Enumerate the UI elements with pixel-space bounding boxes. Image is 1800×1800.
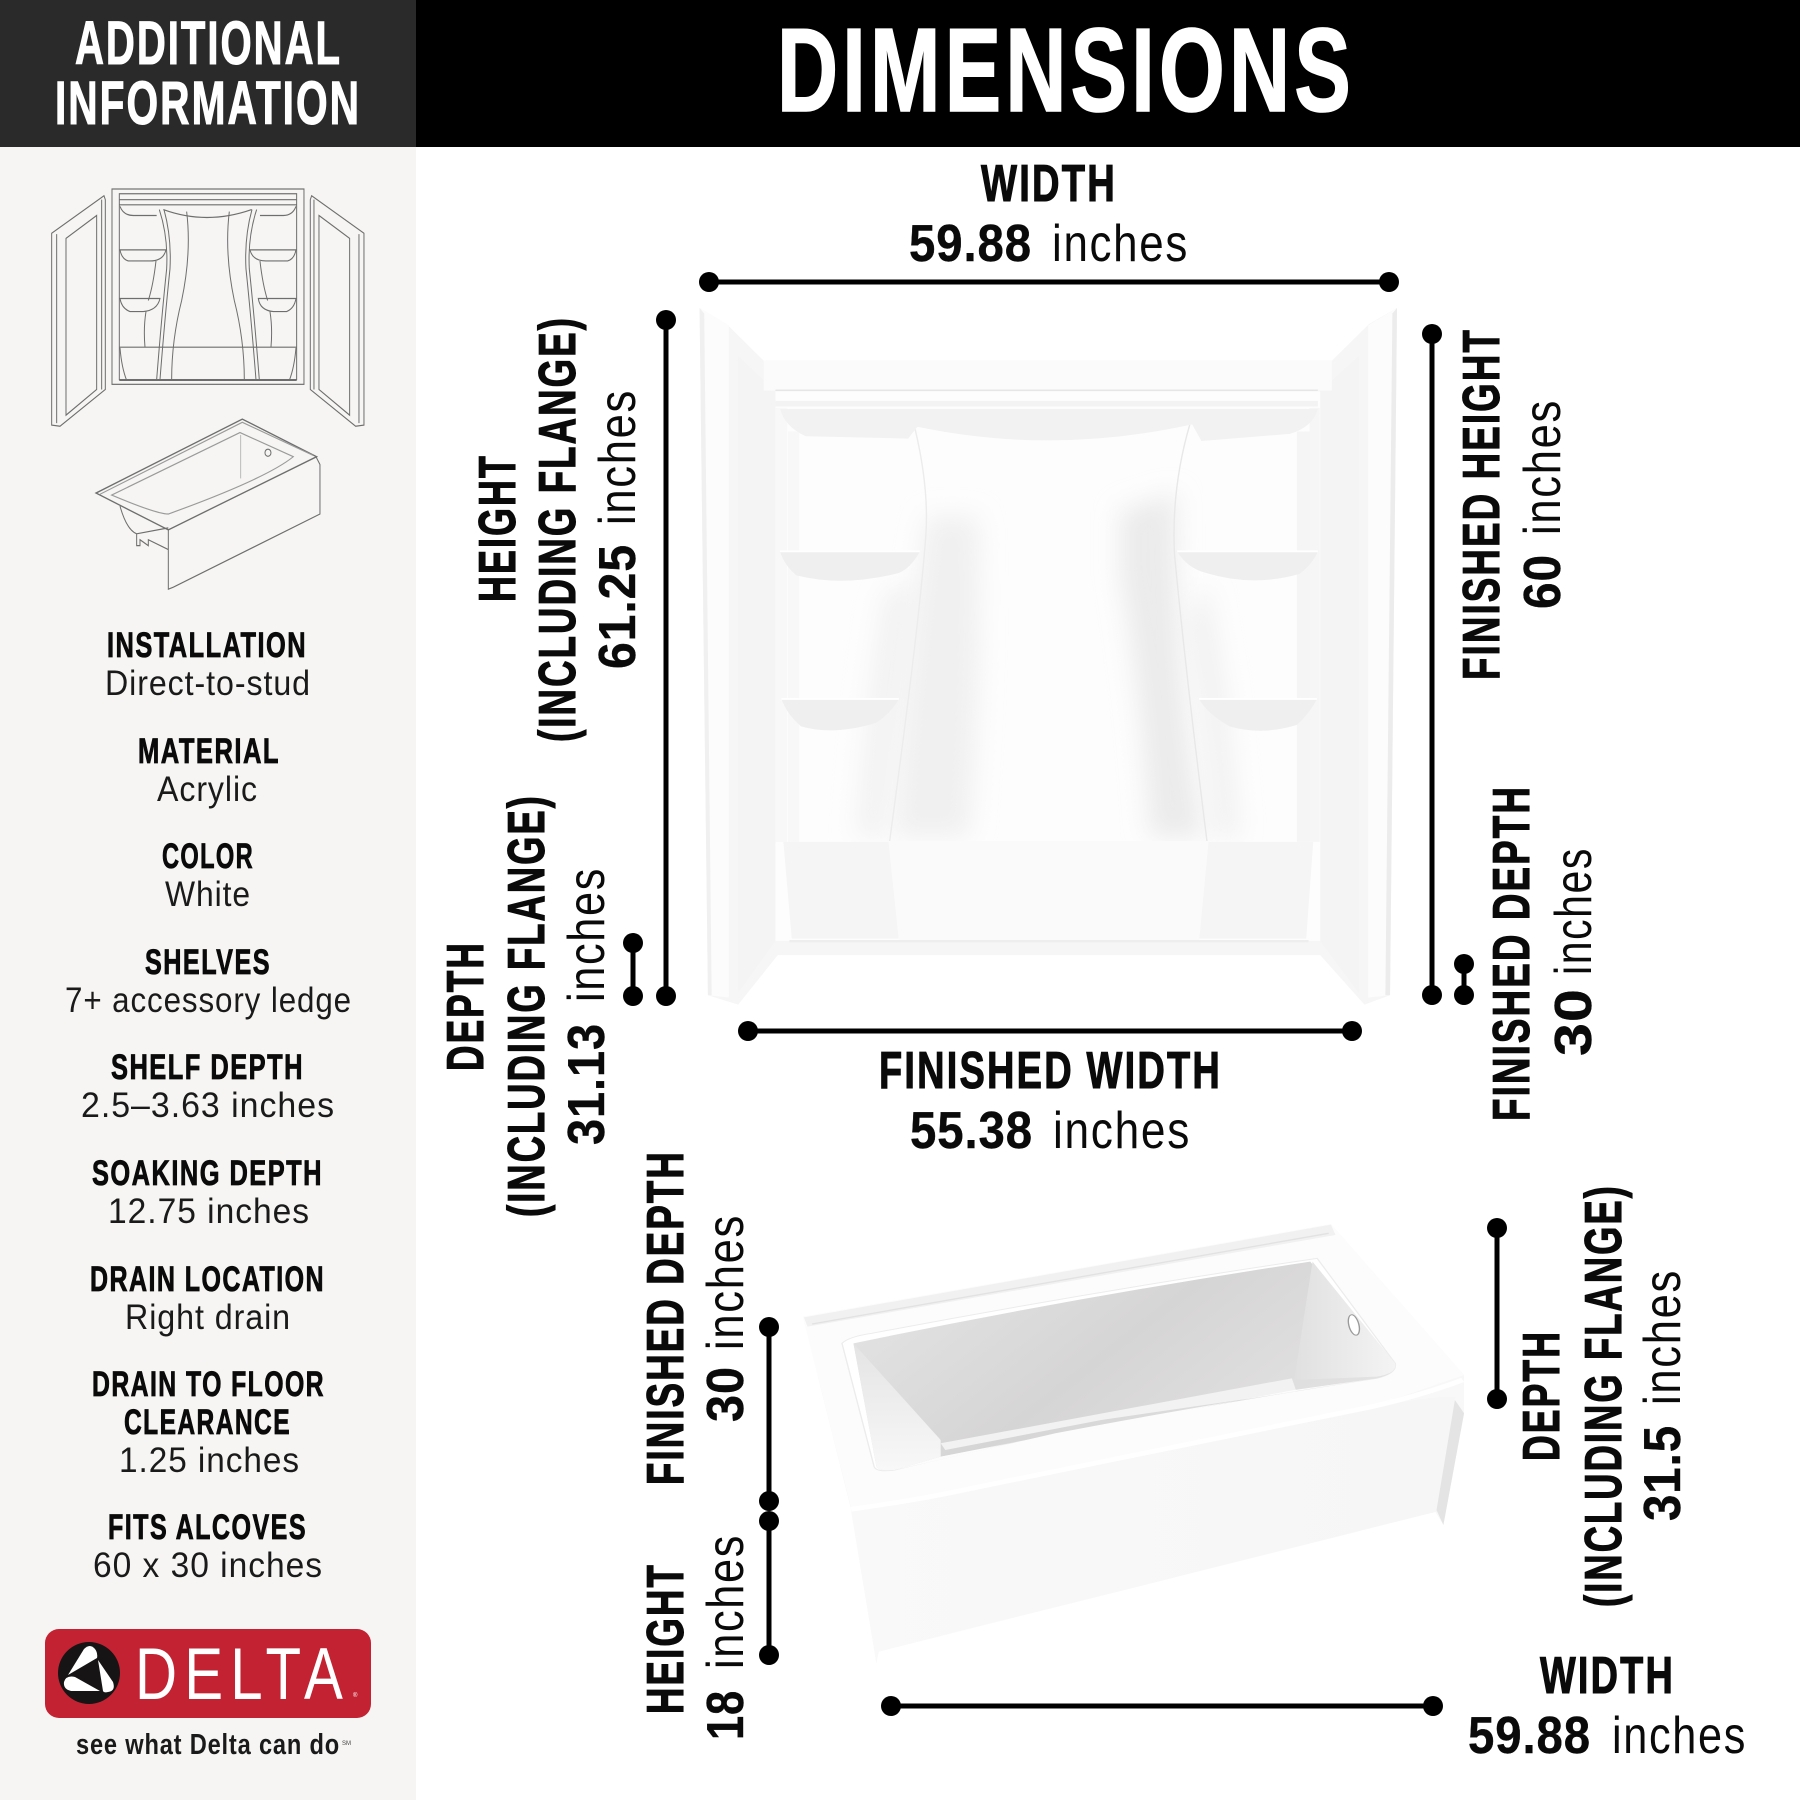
dimension: height including flange: 61.25 [589, 544, 647, 669]
dimension: top width [699, 155, 1399, 292]
spec: installation: INSTALLATION [107, 626, 307, 665]
icon: delta emblem [58, 1642, 120, 1704]
shower wall illustration [700, 308, 1397, 1005]
top shelf [780, 409, 1318, 441]
dimension: finished width [738, 1021, 1362, 1160]
spec: soaking depth: 12.75 inches [108, 1192, 310, 1231]
sidebar background panel [0, 147, 416, 1800]
dimension: tub height: HEIGHT [637, 1563, 695, 1714]
dimension: tub depth including flange: DEPTH [1513, 1330, 1571, 1461]
dimension: finished height: 60 [1514, 554, 1572, 609]
dimension: tub depth including flange: inches [1634, 1269, 1692, 1405]
dimension: tub finished depth [637, 1150, 779, 1511]
tub-level band [783, 842, 899, 939]
dimension: tub width: WIDTH [1540, 1647, 1675, 1705]
dimension: top width: 59.88 [909, 215, 1032, 273]
dimension: finished height: inches [1514, 399, 1572, 535]
dimension: finished depth [1454, 785, 1603, 1121]
dimension: tub width: inches [1612, 1707, 1747, 1765]
spec: installation [105, 626, 311, 703]
logo: delta: see what Delta can do [76, 1729, 340, 1761]
spec: material [138, 732, 280, 809]
spec: material: Acrylic [157, 770, 258, 809]
dimension: finished height: FINISHED HEIGHT [1453, 328, 1511, 680]
dimension: depth including flange: DEPTH [437, 941, 495, 1071]
dimension: depth including flange: 31.13 [558, 1023, 616, 1145]
dimension: top width: WIDTH [981, 155, 1117, 213]
dimension: tub depth including flange: 31.5 [1634, 1425, 1692, 1521]
header: additional information: ADDITIONAL [75, 9, 342, 77]
dimension: tub finished depth: 30 [697, 1366, 755, 1422]
dimension: depth including flange: (INCLUDING FLANGE) [498, 794, 556, 1217]
dimension: tub finished depth: inches [697, 1214, 755, 1350]
spec: shelves: 7+ accessory ledge [65, 981, 352, 1020]
dimension: finished depth: 30 [1545, 988, 1603, 1056]
logo: delta: DELTA [135, 1634, 350, 1715]
spec: shelves: SHELVES [145, 943, 271, 982]
dimension: top width: inches [1052, 215, 1189, 273]
dimension: tub width [881, 1647, 1747, 1765]
logo: delta [45, 1629, 371, 1761]
spec: fits alcoves [93, 1508, 323, 1585]
spec: material: MATERIAL [138, 732, 280, 771]
spec: soaking depth: SOAKING DEPTH [92, 1154, 323, 1193]
right shelves [1177, 552, 1318, 731]
dimension: finished depth: FINISHED DEPTH [1483, 785, 1541, 1121]
dimension: finished depth: inches [1545, 847, 1603, 975]
back panel shading [857, 493, 1239, 837]
spec: drain to floor clearance: CLEARANCE [124, 1403, 291, 1442]
dimension: height including flange: (INCLUDING FLANGE) [529, 316, 587, 742]
spec: drain location: DRAIN LOCATION [90, 1260, 325, 1299]
dimension: height including flange: inches [589, 389, 647, 525]
spec: drain location: Right drain [125, 1298, 291, 1337]
sidebar: specification list [65, 626, 352, 1585]
front skirt [851, 1397, 1455, 1663]
spec: fits alcoves: 60 x 30 inches [93, 1546, 323, 1585]
dimension: depth including flange [437, 794, 643, 1217]
dimension: finished width: inches [1053, 1102, 1191, 1160]
dimension: height including flange [469, 310, 676, 1006]
dimension: tub finished depth: FINISHED DEPTH [637, 1150, 695, 1485]
dimension: tub height: 18 [697, 1690, 755, 1740]
dimension: finished width: 55.38 [910, 1102, 1033, 1160]
dimension: tub depth including flange: (INCLUDING FLANGE) [1575, 1184, 1633, 1607]
spec: color: White [165, 875, 251, 914]
dimension: tub height [637, 1511, 779, 1740]
spec: drain location [90, 1260, 325, 1337]
spec: drain to floor clearance: DRAIN TO FLOOR [92, 1365, 325, 1404]
dimension: tub depth including flange [1487, 1184, 1692, 1607]
header: additional information [0, 0, 416, 147]
spec: shelves [65, 943, 352, 1020]
spec: fits alcoves: FITS ALCOVES [108, 1508, 307, 1547]
spec: shelf depth [81, 1048, 335, 1125]
dimension: finished width: FINISHED WIDTH [879, 1042, 1222, 1100]
header: dimensions title: DIMENSIONS [777, 4, 1355, 137]
header: additional information: INFORMATION [55, 69, 361, 137]
spec: shelf depth: SHELF DEPTH [111, 1048, 304, 1087]
logo: delta: SM [342, 1741, 351, 1747]
spec: drain to floor clearance: 1.25 inches [119, 1441, 300, 1480]
header: dimensions title [416, 0, 1800, 147]
spec: color: COLOR [162, 837, 254, 876]
logo: delta: ® [353, 1692, 358, 1699]
spec: soaking depth [92, 1154, 323, 1231]
spec: installation: Direct-to-stud [105, 664, 311, 703]
dimension: height including flange: HEIGHT [469, 454, 527, 602]
spec: drain to floor clearance [92, 1365, 325, 1480]
spec: shelf depth: 2.5–3.63 inches [81, 1086, 335, 1125]
dimension: tub width: 59.88 [1468, 1707, 1591, 1765]
spec: color [162, 837, 254, 914]
left shelves [780, 552, 920, 730]
dimension: tub height: inches [697, 1534, 755, 1669]
bathtub illustration [803, 1224, 1464, 1663]
icon: shower wall line drawing [52, 189, 364, 589]
dimension: depth including flange: inches [558, 867, 616, 1002]
dimension: finished height [1422, 324, 1572, 1005]
basin [842, 1258, 1395, 1471]
